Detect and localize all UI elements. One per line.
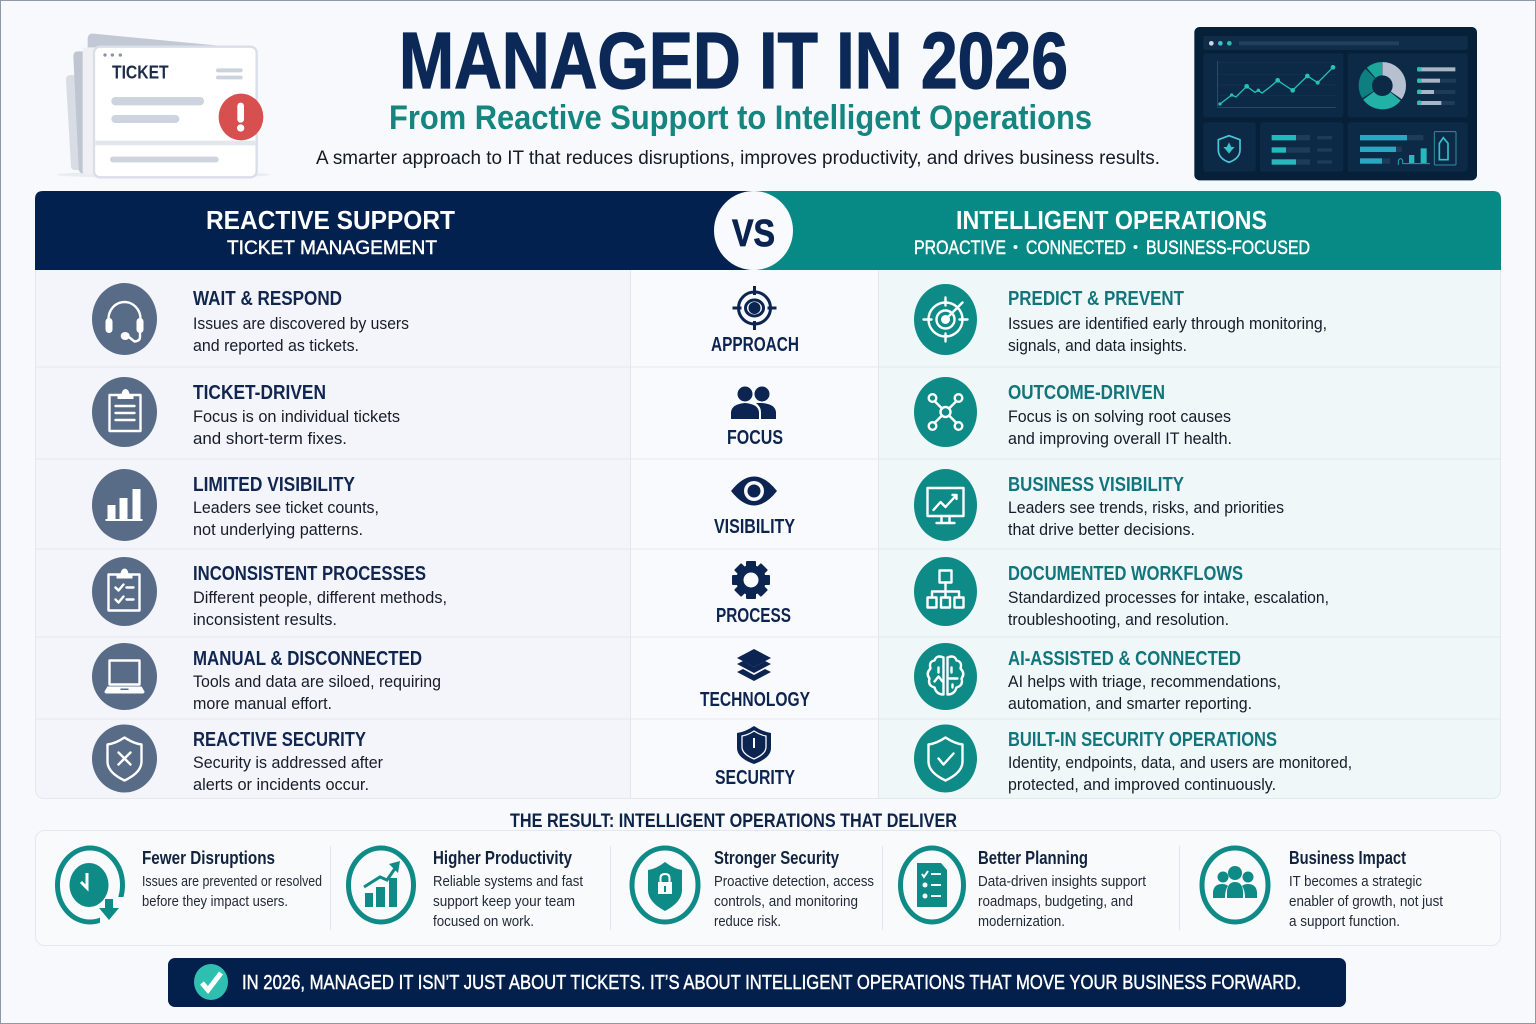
callout banner: IN 2026, MANAGED IT ISN’T JUST ABOUT TICKETS. IT’S ABOUT INTELLIGENT OPERATIONS THAT MOVE YOUR BUSINESS FORWARD. — [242, 972, 1301, 994]
icon: brain — [914, 643, 977, 710]
result: better planning: roadmaps, budgeting, and — [978, 893, 1133, 910]
result: business impact: Business Impact — [1289, 848, 1406, 868]
row: manual and disconnected — [92, 643, 441, 713]
panel: results — [36, 830, 1500, 946]
category: focus — [727, 386, 783, 449]
header: reactive support: TICKET MANAGEMENT — [227, 238, 437, 259]
result: higher productivity: focused on work. — [433, 913, 534, 930]
title: MANAGED IT IN 2026 — [399, 16, 1068, 105]
row: manual and disconnected: Tools and data are siloed, requiring — [193, 672, 441, 691]
row: inconsistent processes: inconsistent results. — [193, 610, 337, 629]
icon: radar target — [914, 284, 977, 355]
row: ticket-driven: and short-term fixes. — [193, 429, 347, 448]
category: visibility — [714, 476, 796, 538]
icon: bar chart — [92, 469, 157, 541]
header: intelligent operations: BUSINESS-FOCUSED — [1146, 238, 1310, 259]
result: stronger security — [632, 848, 874, 930]
row: outcome-driven: and improving overall IT health. — [1008, 429, 1232, 448]
category: technology: TECHNOLOGY — [700, 689, 811, 711]
row: predict and prevent: Issues are identified early through monitoring, — [1008, 314, 1327, 333]
category: process — [716, 561, 791, 627]
row: ai-assisted and connected: automation, and smarter reporting. — [1008, 694, 1252, 713]
category: security — [715, 726, 796, 789]
result: business impact: IT becomes a strategic — [1289, 873, 1422, 890]
row: predict and prevent: signals, and data insights. — [1008, 336, 1187, 355]
icon: growth chart — [348, 848, 414, 922]
icon: document checklist — [900, 848, 964, 922]
result: fewer disruptions: before they impact users. — [142, 893, 288, 910]
result: better planning: Better Planning — [978, 848, 1088, 868]
row: outcome-driven: OUTCOME-DRIVEN — [1008, 382, 1165, 404]
row: wait and respond: WAIT & RESPOND — [193, 288, 342, 310]
result: business impact — [1202, 848, 1444, 930]
callout banner — [168, 958, 1346, 1007]
result: better planning: Data-driven insights support — [978, 873, 1147, 890]
row: reactive security: alerts or incidents occur. — [193, 775, 369, 794]
header: intelligent operations: PROACTIVE — [914, 238, 1006, 259]
result: business impact: enabler of growth, not just — [1289, 893, 1444, 910]
icon: clipboard — [92, 377, 157, 447]
header: reactive support — [35, 191, 760, 270]
category: process: PROCESS — [716, 605, 791, 627]
icon: shield with x — [92, 724, 157, 792]
row: limited visibility — [92, 469, 379, 541]
row: built-in security operations — [914, 724, 1352, 794]
result: better planning — [900, 848, 1147, 930]
icon: network — [914, 377, 977, 447]
row: documented workflows — [914, 557, 1329, 629]
icon: ticket cards illustration: TICKET — [112, 61, 169, 82]
row: predict and prevent: PREDICT & PREVENT — [1008, 288, 1184, 310]
column backgrounds — [35, 268, 1501, 799]
category: approach: APPROACH — [711, 334, 799, 356]
result: business impact: a support function. — [1289, 913, 1400, 930]
row: wait and respond: and reported as tickets. — [193, 336, 359, 355]
row: documented workflows: Standardized processes for intake, escalation, — [1008, 588, 1329, 607]
result: fewer disruptions — [58, 848, 322, 923]
row: reactive security — [92, 724, 383, 794]
row: ai-assisted and connected — [914, 643, 1281, 713]
row: reactive security: Security is addressed after — [193, 753, 383, 772]
row: documented workflows: troubleshooting, and resolution. — [1008, 610, 1229, 629]
row: ticket-driven — [92, 377, 400, 448]
result: higher productivity — [348, 848, 584, 930]
row: wait and respond: Issues are discovered by users — [193, 314, 409, 333]
icon: ticket cards illustration — [57, 34, 270, 178]
subtitle: From Reactive Support to Intelligent Operations — [389, 99, 1092, 137]
row: manual and disconnected: more manual effort. — [193, 694, 332, 713]
icon: gear — [732, 561, 770, 599]
row: ticket-driven: TICKET-DRIVEN — [193, 382, 326, 404]
icon: people — [731, 386, 776, 419]
icon: headset — [92, 283, 157, 355]
icon: team — [1202, 848, 1268, 922]
row: ai-assisted and connected: AI helps with triage, recommendations, — [1008, 672, 1281, 691]
row: business visibility: Leaders see trends, risks, and priorities — [1008, 498, 1284, 517]
comparison table — [35, 191, 1501, 799]
icon: org chart — [914, 557, 977, 626]
icon: target — [732, 286, 776, 330]
result: stronger security: controls, and monitoring — [714, 893, 858, 910]
tagline: A smarter approach to IT that reduces disruptions, improves productivity, and drives business results. — [316, 148, 1160, 169]
category: focus: FOCUS — [727, 427, 783, 449]
icon: checklist clipboard — [92, 557, 157, 626]
result: stronger security: reduce risk. — [714, 913, 781, 930]
row: wait and respond — [92, 283, 409, 355]
result: stronger security: Stronger Security — [714, 848, 839, 868]
row: predict and prevent — [914, 284, 1327, 355]
header: intelligent operations: CONNECTED — [1026, 238, 1126, 259]
icon: eye — [731, 476, 777, 506]
row: manual and disconnected: MANUAL & DISCONNECTED — [193, 648, 422, 670]
row: limited visibility: LIMITED VISIBILITY — [193, 474, 356, 496]
result: stronger security: Proactive detection, access — [714, 873, 874, 890]
icon: shield with lock — [632, 848, 698, 922]
row: ai-assisted and connected: AI-ASSISTED & CONNECTED — [1008, 648, 1241, 670]
result: higher productivity: Reliable systems and fast — [433, 873, 584, 890]
row: ticket-driven: Focus is on individual tickets — [193, 407, 400, 426]
icon: layers — [737, 649, 771, 681]
category: security: SECURITY — [715, 767, 796, 789]
icon: monitor chart — [914, 469, 977, 541]
row: inconsistent processes: Different people, different methods, — [193, 588, 447, 607]
row: business visibility: that drive better decisions. — [1008, 520, 1195, 539]
category: technology — [700, 649, 811, 711]
category: approach — [711, 286, 799, 356]
row: inconsistent processes: INCONSISTENT PROCESSES — [193, 563, 426, 585]
icon: shield with check — [914, 724, 977, 792]
result: fewer disruptions: Issues are prevented or resolved — [142, 873, 322, 890]
header: intelligent operations — [754, 191, 1501, 270]
row: built-in security operations: Identity, endpoints, data, and users are monitored, — [1008, 753, 1352, 772]
icon: shield — [737, 726, 771, 764]
row: inconsistent processes — [92, 557, 447, 629]
row: outcome-driven — [914, 377, 1232, 448]
row: business visibility — [914, 469, 1284, 541]
row: built-in security operations: protected, and improved continuously. — [1008, 775, 1276, 794]
row: reactive security: REACTIVE SECURITY — [193, 729, 367, 751]
icon: laptop — [92, 643, 157, 710]
icon: clock with down arrow — [58, 848, 124, 923]
result: higher productivity: Higher Productivity — [433, 848, 572, 868]
row: limited visibility: not underlying patterns. — [193, 520, 363, 539]
result: fewer disruptions: Fewer Disruptions — [142, 848, 275, 868]
VS badge — [714, 191, 793, 270]
row: business visibility: BUSINESS VISIBILITY — [1008, 474, 1185, 496]
icon: check badge — [194, 964, 228, 1000]
row: outcome-driven: Focus is on solving root causes — [1008, 407, 1231, 426]
row: limited visibility: Leaders see ticket counts, — [193, 498, 379, 517]
header: reactive support: REACTIVE SUPPORT — [206, 205, 455, 235]
icon: analytics dashboard — [1194, 27, 1477, 180]
row: documented workflows: DOCUMENTED WORKFLOWS — [1008, 563, 1243, 585]
result: better planning: modernization. — [978, 913, 1065, 930]
row: built-in security operations: BUILT-IN SECURITY OPERATIONS — [1008, 729, 1277, 751]
result: higher productivity: support keep your team — [433, 893, 575, 910]
results heading: THE RESULT: INTELLIGENT OPERATIONS THAT DELIVER — [510, 811, 957, 832]
header: intelligent operations: INTELLIGENT OPERATIONS — [956, 205, 1267, 235]
VS badge: VS — [732, 213, 775, 255]
category: visibility: VISIBILITY — [714, 516, 796, 538]
